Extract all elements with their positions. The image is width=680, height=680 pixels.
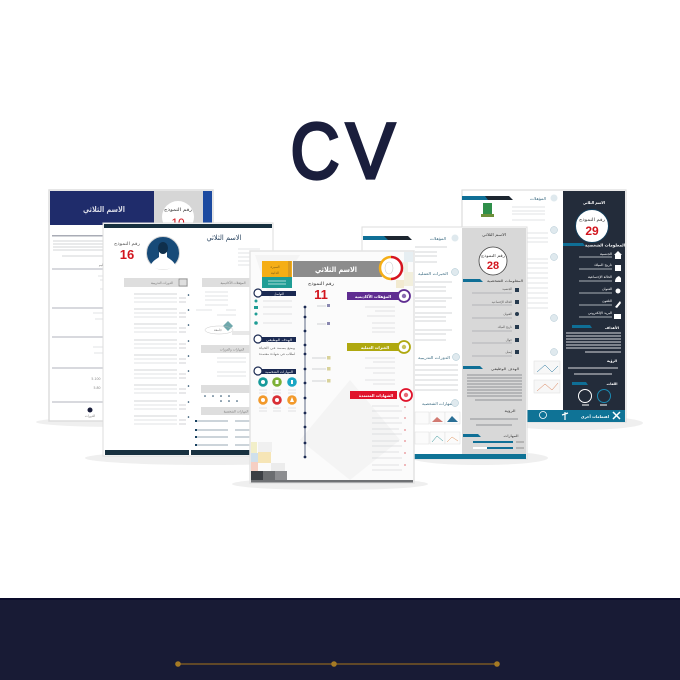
vision [568, 359, 618, 374]
name banner: الاسم الثلاثي [315, 265, 357, 274]
section header: courses [124, 278, 188, 287]
personal info rows: العنوان [602, 287, 612, 291]
section header: languages [201, 385, 271, 402]
number badge 10: رقم النموذج [164, 208, 192, 213]
title: CV: V [346, 108, 395, 196]
number badge 29: رقم النموذج [579, 218, 605, 223]
number badge 28 [479, 247, 507, 275]
objectives [566, 325, 621, 352]
qualification rows [365, 307, 395, 332]
section header: activities: المهارات والدورات [220, 348, 244, 352]
personal info: العنوان [503, 312, 512, 316]
timeline decoration [175, 661, 500, 667]
icon: footer item [85, 408, 95, 418]
number label 11 [308, 282, 334, 302]
personal info: الحالة الإجتماعية [492, 300, 512, 305]
number badge 29: 29 [585, 224, 599, 238]
colour mosaic [251, 442, 287, 482]
sidebar [563, 191, 626, 410]
text rows [415, 247, 458, 390]
certificate rows [372, 406, 406, 470]
personal info rows: التلفون [602, 299, 612, 303]
skill icons [258, 377, 297, 411]
icon: avatar [146, 236, 180, 270]
CV template 10 [49, 190, 213, 421]
left heading: career objective [254, 335, 296, 356]
number badge 10: 10 [171, 216, 185, 230]
left heading: contact [254, 289, 296, 297]
skills thumbnails [415, 412, 460, 444]
section header: activities [201, 345, 271, 376]
skills thumbnails [534, 361, 560, 393]
left heading: career objective: وضع بصمة في الحياة [259, 346, 296, 350]
section rules [52, 269, 104, 402]
left heading: contact: التواصل [274, 292, 284, 296]
gold label [262, 261, 292, 288]
vision: الرؤية [504, 409, 516, 413]
document shadows [36, 416, 643, 490]
qualification banner [363, 234, 458, 242]
university logo: جامعة [214, 328, 222, 332]
section header: personal skills [195, 407, 271, 446]
icon: portrait ring [380, 257, 402, 279]
footer bar [251, 480, 413, 482]
number label 16: رقم النموذج [114, 242, 140, 247]
footer: other interests [527, 410, 625, 422]
heading: work experience [347, 341, 410, 353]
section header: qualifications [196, 278, 272, 315]
footer band [0, 598, 680, 680]
personal info rows: تاريخ الميلاد [594, 263, 612, 267]
section headings: المهارات الشخصية [422, 401, 454, 406]
CV template 28 [362, 227, 527, 459]
career objective: الهدف الوظيفي [491, 367, 519, 371]
background facets [255, 252, 413, 480]
personal info icons [614, 251, 622, 319]
qualification rows [512, 207, 548, 308]
career objective [463, 366, 522, 400]
left heading: personal skills [254, 367, 296, 375]
left heading: personal skills: المهارات الشخصية [265, 370, 293, 374]
icon: footer item: الدورات [85, 414, 95, 418]
personal info heading: المعلومات الشخصية [585, 242, 626, 248]
skills bars: المهارات [504, 434, 519, 438]
personal info rows: الحالة الإجتماعية [588, 275, 612, 280]
number label 16 [114, 242, 140, 262]
personal info: إيميل [505, 350, 512, 355]
skills values: 5.100 [91, 377, 101, 381]
name: الاسم الثلاثي [206, 234, 242, 242]
gold label: الذاتية [271, 271, 279, 275]
personal info heading [563, 242, 626, 248]
skills values: 5.80 [93, 386, 101, 390]
personal info: تاريخ الميلاد [498, 325, 512, 329]
section icons [550, 226, 558, 356]
vision: الرؤية [607, 359, 617, 363]
personal info rows [579, 252, 612, 317]
qualification banner: المؤهلات [530, 196, 546, 201]
courses list [134, 294, 189, 424]
CV template 16 [103, 223, 273, 456]
experience rows [365, 358, 395, 384]
name banner [293, 261, 382, 277]
left heading: career objective: الهدف الوظيفي [266, 338, 292, 342]
timeline [304, 304, 330, 458]
vision [470, 409, 518, 425]
university logo [205, 321, 250, 335]
number badge 29 [576, 210, 608, 242]
CV template 29 [462, 190, 626, 422]
footer bar [363, 454, 526, 459]
sidebar: الاسم الثلاثي [583, 200, 606, 205]
section header: qualifications: المؤهلات الأكاديمية [221, 280, 246, 285]
footer bar [105, 450, 271, 455]
contact rows [254, 300, 292, 325]
number label 16: 16 [120, 247, 134, 262]
objectives: الأهداف [605, 325, 619, 330]
heading: certificates: الشهادات المعتمدة [359, 393, 393, 398]
number badge 28: 28 [487, 260, 499, 272]
heading: academic qualifications [347, 290, 410, 302]
personal info: جوال [506, 338, 512, 342]
qualification banner: المؤهلات [430, 236, 446, 241]
personal info rows: البريد الإلكتروني [588, 311, 612, 316]
profile text: التعليم [99, 263, 107, 267]
header band: الاسم الثلاثي [83, 205, 125, 214]
skills bars [463, 434, 524, 449]
title: CV: C [290, 106, 340, 195]
section header: personal skills: المهارات الشخصية [224, 410, 248, 414]
grey sidebar [462, 228, 526, 454]
section icons [452, 268, 460, 406]
number badge 28: رقم النموذج [481, 253, 505, 258]
qualification banner [462, 194, 558, 202]
title: CV [290, 106, 395, 196]
section header: courses: الدورات التدريبية [151, 281, 173, 285]
personal info: الجنسية [502, 287, 512, 291]
gold label: السيرة [270, 265, 280, 269]
header band [50, 191, 212, 225]
number label 11: رقم النموذج [308, 282, 334, 287]
number badge 10 [162, 201, 194, 233]
footer: other interests: اهتمامات أخرى [581, 414, 610, 419]
section headings [418, 271, 454, 406]
heading: work experience: الخبرات العملية [361, 345, 390, 350]
number label 11: 11 [314, 287, 328, 302]
icon: institution logo [481, 203, 494, 217]
left heading: career objective: لطلاب في شهادة معتمدة [259, 352, 295, 356]
languages [572, 382, 618, 405]
profile text [52, 235, 112, 267]
personal info [463, 279, 523, 356]
heading: academic qualifications: المؤهلات الأكاديمية [355, 294, 392, 299]
heading: certificates [350, 389, 412, 401]
grey sidebar: الاسم الثلاثي [482, 232, 506, 237]
section headings: الدورات التدريبية [418, 355, 450, 360]
skills values [91, 377, 101, 390]
personal info rows: الجنسية [600, 252, 612, 256]
CV template 11 [250, 251, 414, 483]
section headings: الخبرات العملية [418, 271, 448, 276]
personal info: المعلومات الشخصية [487, 279, 523, 283]
languages: اللغات [606, 382, 618, 386]
